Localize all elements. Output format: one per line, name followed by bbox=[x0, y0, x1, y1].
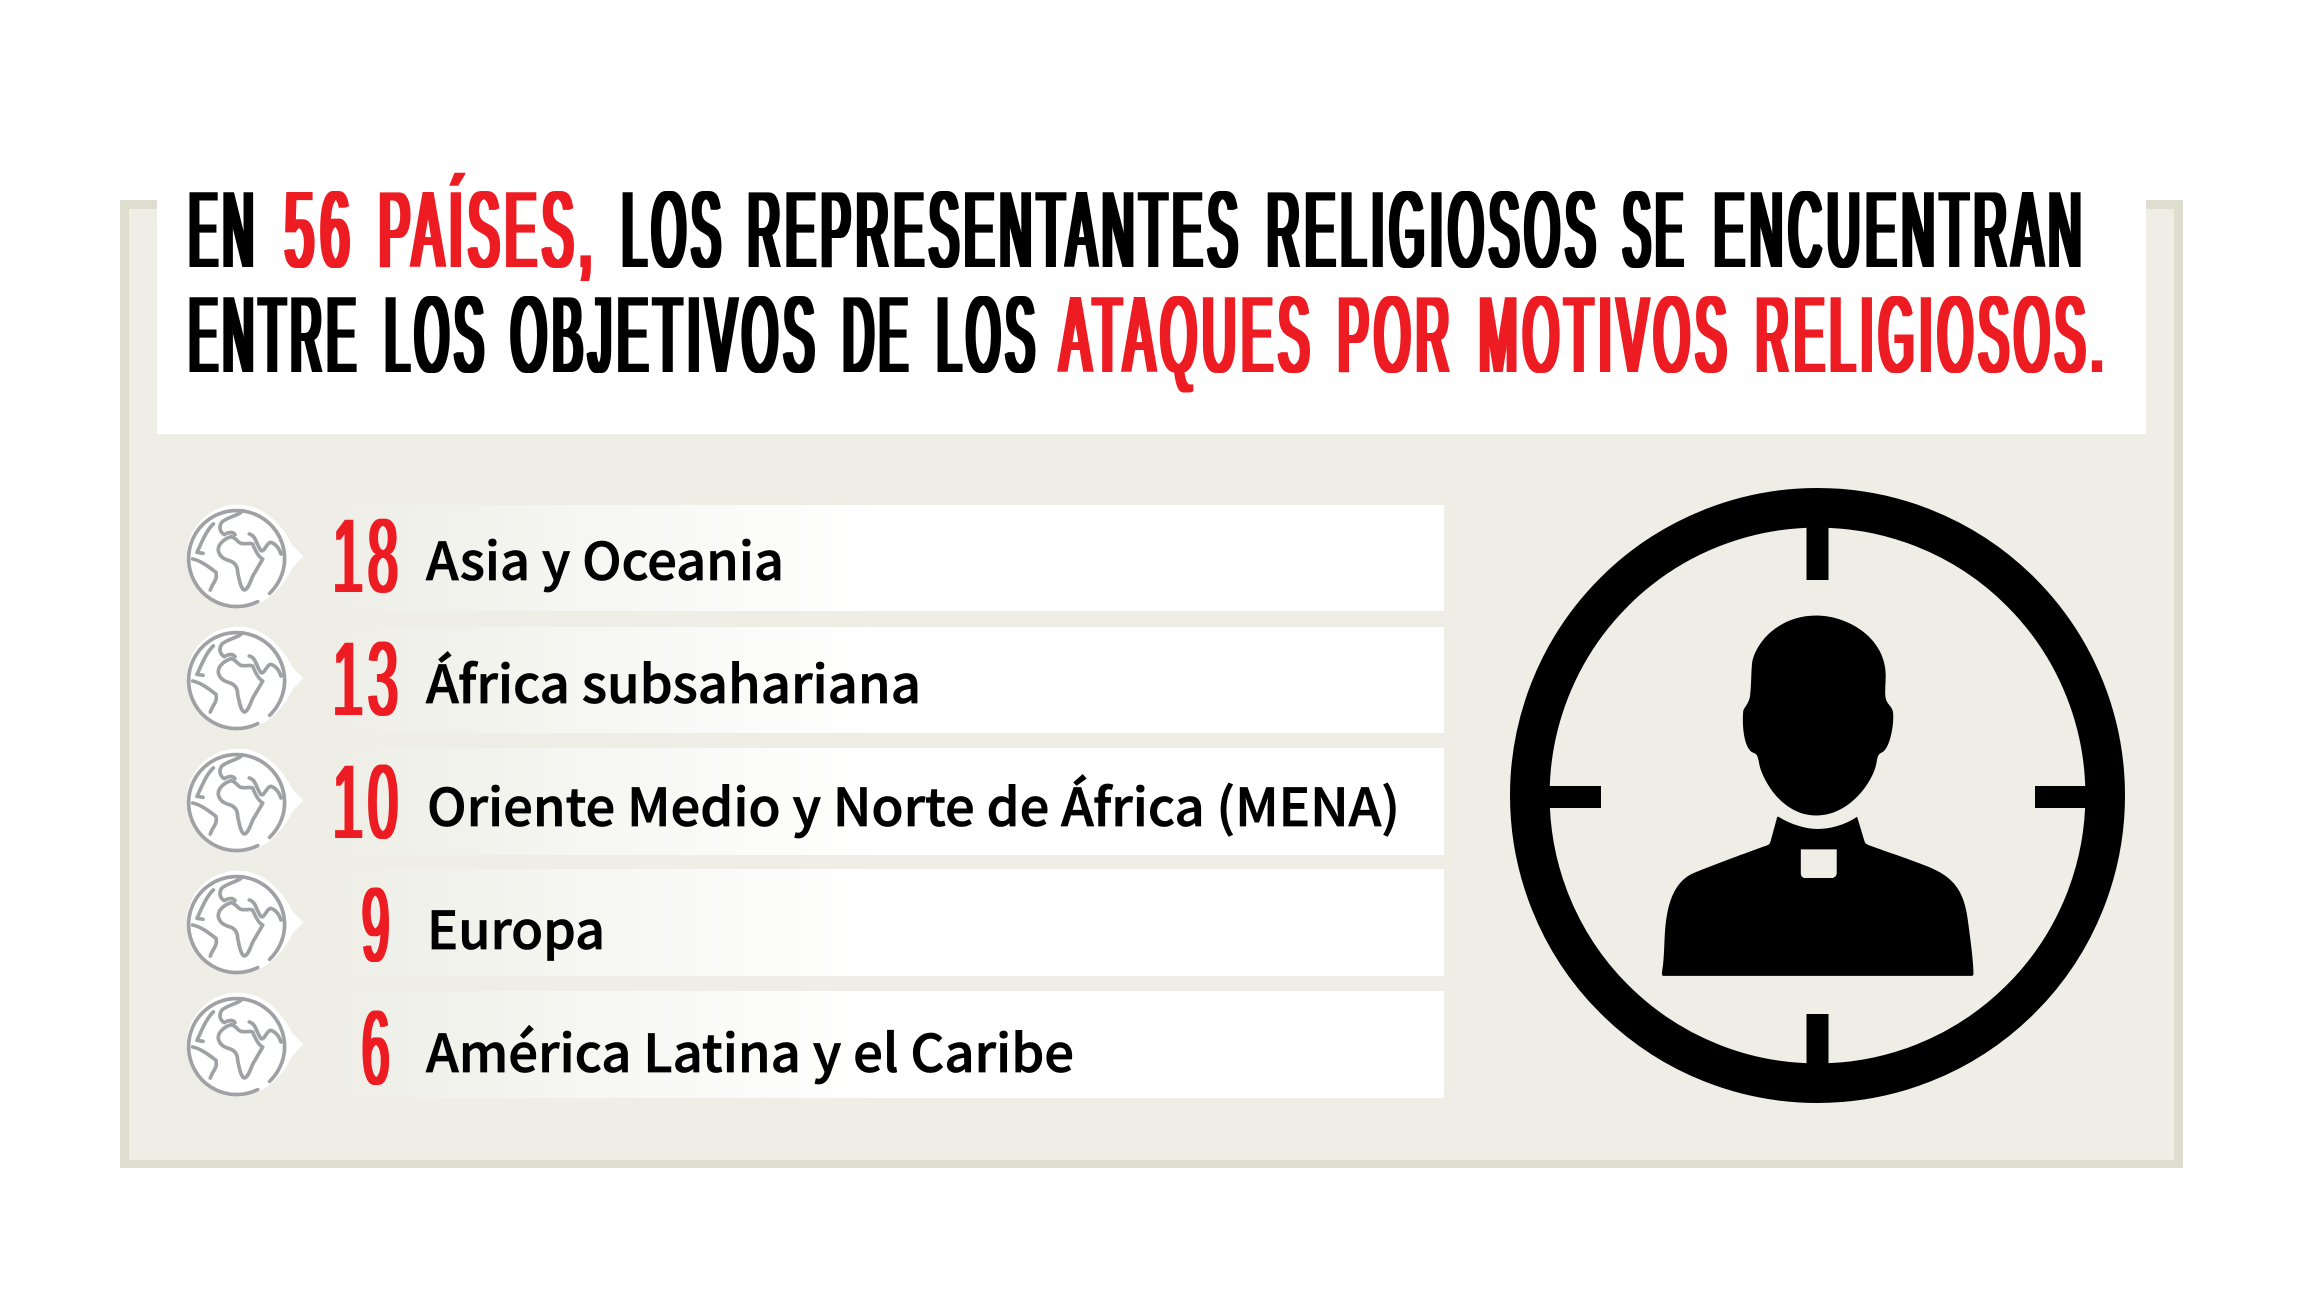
icon: globe Asia y Oceania bbox=[187, 505, 303, 608]
title: MOTIVOS bbox=[1479, 274, 1732, 396]
title bbox=[189, 169, 2109, 396]
numbers: 6 bbox=[362, 990, 394, 1107]
panel: inner background bbox=[129, 209, 2174, 1160]
title: OBJETIVOS bbox=[511, 274, 820, 396]
numbers: 18 bbox=[333, 498, 403, 615]
panel: title background bbox=[157, 185, 2146, 434]
title: DE bbox=[843, 274, 913, 396]
numbers: 9 bbox=[362, 867, 394, 984]
icon: globe Europa bbox=[187, 871, 303, 974]
icon: globe América Latina bbox=[187, 993, 303, 1096]
title: RELIGIOSOS bbox=[1267, 169, 1601, 291]
labels: Oriente Medio y Norte de África (MENA) bbox=[427, 766, 1400, 841]
title: 56 bbox=[285, 169, 356, 291]
title: SE bbox=[1623, 169, 1688, 291]
title: REPRESENTANTES bbox=[748, 169, 1243, 291]
title: LOS bbox=[385, 274, 489, 396]
title: LOS bbox=[937, 274, 1040, 396]
icon: priest silhouette bbox=[1662, 616, 1973, 976]
labels: Europa bbox=[427, 889, 605, 964]
title: EN bbox=[189, 169, 259, 291]
title: PAÍSES, bbox=[379, 169, 598, 291]
labels: Asia y Oceania bbox=[426, 520, 784, 595]
numbers: 10 bbox=[333, 744, 403, 861]
numbers bbox=[333, 498, 403, 1107]
labels: América Latina y el Caribe bbox=[426, 1012, 1074, 1087]
icon: target crosshair bbox=[1530, 508, 2105, 1083]
title: ATAQUES bbox=[1060, 274, 1315, 396]
labels bbox=[426, 520, 1400, 1087]
icon: globe África subsahariana bbox=[187, 627, 303, 730]
icon: globe MENA bbox=[187, 749, 303, 852]
title: POR bbox=[1338, 274, 1455, 396]
row bars bbox=[330, 505, 1444, 1098]
title: ENTRE bbox=[189, 274, 361, 396]
labels: África subsahariana bbox=[426, 643, 921, 718]
title: LOS bbox=[622, 169, 726, 291]
numbers: 13 bbox=[333, 621, 403, 738]
panel: background frame bbox=[120, 200, 2183, 1168]
